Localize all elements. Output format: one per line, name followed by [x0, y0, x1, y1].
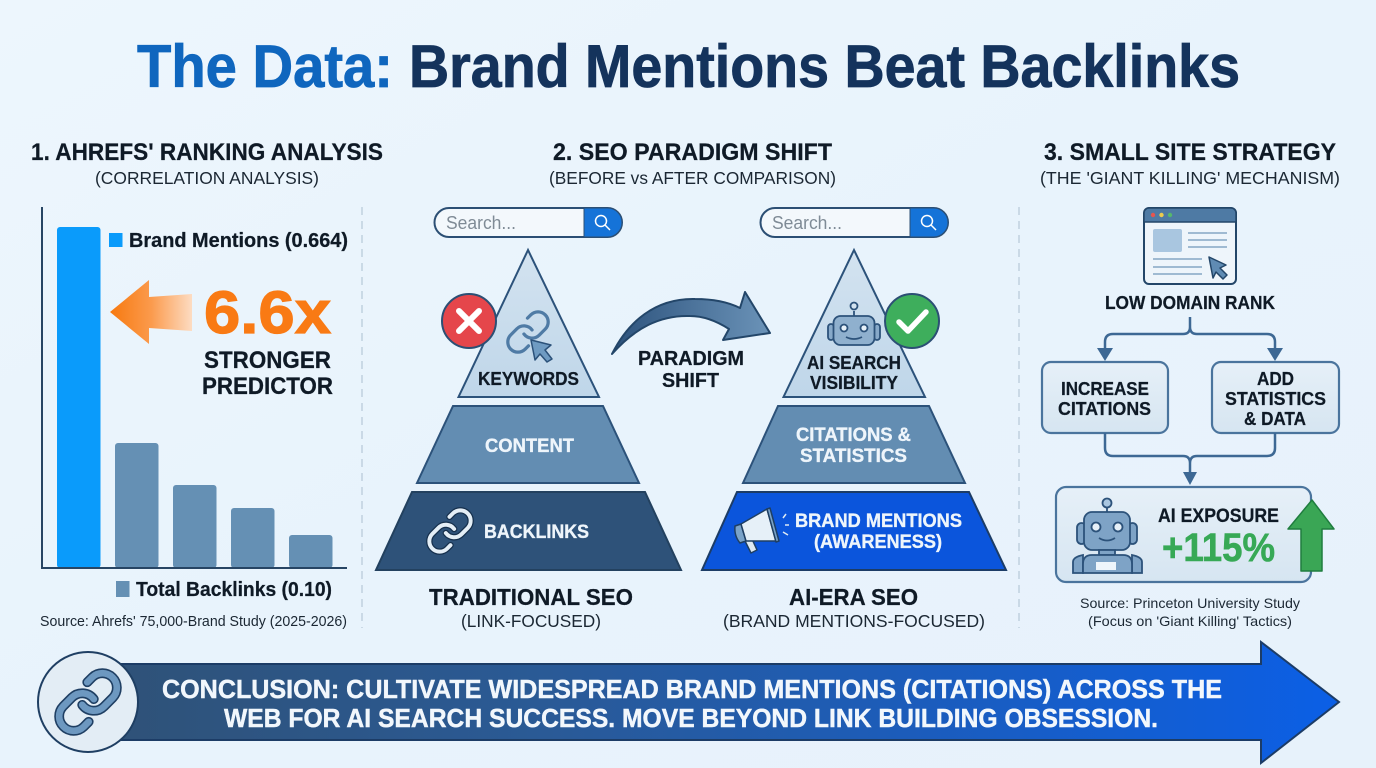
callout: 6.6x stronger predictor: STRONGER: [204, 347, 331, 374]
source: Princeton: (Focus on 'Giant Killing' Tactics): [1088, 613, 1292, 629]
search bar: traditional: [434, 208, 622, 237]
icon: green check badge: [885, 294, 939, 348]
panel: SEO paradigm shift: [376, 139, 1006, 631]
tier: keywords: KEYWORDS: [478, 369, 579, 389]
source: Princeton: Source: Princeton University Study: [1080, 595, 1300, 611]
source: Ahrefs: Source: Ahrefs' 75,000-Brand Study (2025-2026): [40, 614, 347, 630]
panel: Ahrefs ranking analysis: [31, 139, 383, 630]
box: add statistics and data: [1212, 362, 1339, 433]
label: paradigm shift: [638, 348, 744, 392]
tier: backlinks: [376, 492, 681, 570]
arrow: points to brand mentions bar: [110, 280, 192, 344]
callout: 6.6x stronger predictor: 6.6x: [204, 279, 331, 346]
box: add statistics and data: STATISTICS: [1225, 389, 1326, 409]
banner: conclusion arrow: [38, 642, 1339, 763]
tier: brand mentions: BRAND MENTIONS: [795, 511, 962, 532]
box: AI exposure result: [1056, 487, 1311, 582]
icon: chain link: [429, 510, 471, 552]
label: paradigm shift: SHIFT: [662, 370, 719, 392]
arrow: merge to AI exposure: [1105, 433, 1275, 485]
tier: AI search visibility: VISIBILITY: [810, 373, 898, 393]
tier: brand mentions: [702, 492, 1006, 570]
box: increase citations: [1042, 362, 1168, 433]
tier: AI search visibility: [784, 250, 925, 397]
title: The Data:: [137, 33, 393, 100]
text: conclusion: [162, 674, 1222, 733]
icon: link with cursor: [508, 312, 552, 362]
tier: content: CONTENT: [485, 436, 574, 457]
arrow: paradigm shift: [612, 292, 770, 354]
text: conclusion: WEB FOR AI SEARCH SUCCESS. MOVE BEYOND LINK BUILDING OBSESSION.: [224, 703, 1158, 733]
arrow: green up: [1288, 500, 1334, 571]
icon: red cross badge: [442, 294, 496, 348]
icon: megaphone: [735, 508, 789, 553]
icon: robot: [1073, 498, 1142, 573]
tier: citations and statistics: CITATIONS &: [796, 425, 911, 446]
icon: chain link in circle: [38, 652, 138, 752]
box: AI exposure result: +115%: [1162, 526, 1275, 570]
icon: robot: [828, 302, 880, 345]
label: traditional SEO: (LINK-FOCUSED): [461, 611, 601, 631]
pyramid: AI-era SEO: [702, 250, 1006, 570]
search bar: traditional: Search...: [446, 213, 516, 233]
box: increase citations: CITATIONS: [1058, 399, 1151, 419]
icon: browser window: [1144, 208, 1236, 284]
label: AI-era SEO: (BRAND MENTIONS-FOCUSED): [723, 611, 985, 631]
arrow: split to two tactics: [1097, 317, 1283, 361]
search bar: AI era: Search...: [772, 213, 842, 233]
heading: section 1: 1. AHREFS' RANKING ANALYSIS: [31, 139, 383, 166]
legend: total backlinks: Total Backlinks (0.10): [136, 579, 332, 601]
tier: content: [417, 406, 639, 483]
subheading: section 2: (BEFORE vs AFTER COMPARISON): [549, 168, 836, 188]
bar chart: [42, 207, 347, 568]
heading: section 2: 2. SEO PARADIGM SHIFT: [553, 139, 832, 166]
tier: AI search visibility: AI SEARCH: [807, 353, 901, 373]
tier: backlinks: BACKLINKS: [484, 522, 589, 543]
pyramid: traditional SEO: [376, 250, 681, 570]
tier: keywords: [458, 250, 599, 397]
tier: citations and statistics: STATISTICS: [800, 446, 907, 467]
subheading: section 3: (THE 'GIANT KILLING' MECHANISM): [1040, 168, 1340, 188]
label: low domain rank: LOW DOMAIN RANK: [1105, 293, 1275, 313]
box: AI exposure result: AI EXPOSURE: [1158, 506, 1279, 527]
search bar: AI era: [760, 208, 948, 237]
callout: 6.6x stronger predictor: [202, 279, 333, 400]
label: AI-era SEO: AI-ERA SEO: [789, 584, 918, 610]
label: traditional SEO: TRADITIONAL SEO: [429, 584, 633, 610]
heading: section 3: 3. SMALL SITE STRATEGY: [1044, 139, 1336, 166]
text: conclusion: CONCLUSION: CULTIVATE WIDESPREAD BRAND MENTIONS (CITATIONS) ACROSS THE: [162, 674, 1222, 704]
box: add statistics and data: & DATA: [1244, 409, 1306, 429]
source: Princeton: [1080, 595, 1300, 629]
label: traditional SEO: [429, 584, 633, 631]
legend: brand mentions: Brand Mentions (0.664): [129, 230, 348, 252]
label: AI-era SEO: [723, 584, 985, 631]
subheading: section 1: (CORRELATION ANALYSIS): [95, 168, 319, 188]
box: increase citations: INCREASE: [1061, 379, 1149, 399]
box: add statistics and data: ADD: [1257, 369, 1294, 389]
tier: citations and statistics: [743, 406, 965, 483]
panel: small site strategy: [1040, 139, 1340, 629]
title: Brand Mentions Beat Backlinks: [409, 33, 1240, 100]
callout: 6.6x stronger predictor: PREDICTOR: [202, 373, 333, 400]
tier: brand mentions: (AWARENESS): [814, 532, 942, 553]
label: paradigm shift: PARADIGM: [638, 348, 744, 370]
